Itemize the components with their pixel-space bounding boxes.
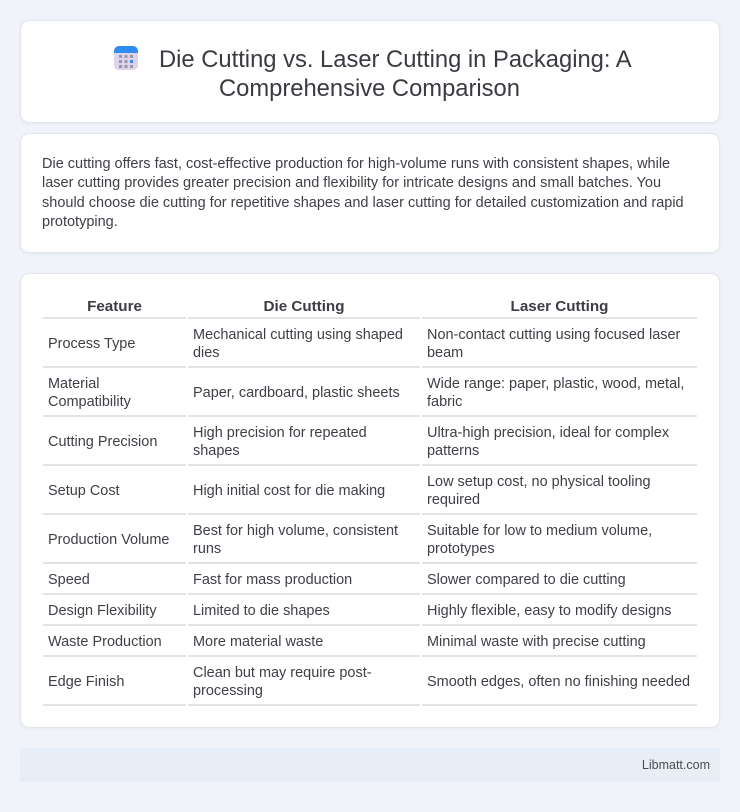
table rows: Fast for mass production	[193, 572, 352, 588]
table rows: prototypes	[427, 541, 495, 557]
icon: calendar	[114, 46, 138, 70]
table rows: required	[427, 492, 480, 508]
table rows: Production Volume	[48, 532, 169, 548]
table rows: Wide range: paper, plastic, wood, metal,	[427, 376, 684, 392]
table rows: Minimal waste with precise cutting	[427, 634, 646, 650]
table rows: Mechanical cutting using shaped	[193, 327, 403, 343]
table rows: Cutting Precision	[48, 434, 157, 450]
panel: comparison table card	[20, 273, 720, 728]
summary text: should choose die cutting for repetitive shapes and laser cutting for detailed customization and rapid	[42, 195, 684, 211]
column header: laser cutting: Laser Cutting	[511, 298, 608, 315]
column header: feature: Feature	[87, 298, 142, 315]
table rows: Clean but may require post-	[193, 665, 372, 681]
table rows: dies	[193, 345, 220, 361]
table rows: Compatibility	[48, 394, 131, 410]
table rows: Limited to die shapes	[193, 603, 330, 619]
table rows: shapes	[193, 443, 240, 459]
table rows: Process Type	[48, 336, 135, 352]
table rows: beam	[427, 345, 463, 361]
table rows: Highly flexible, easy to modify designs	[427, 603, 671, 619]
table rows: Design Flexibility	[48, 603, 157, 619]
table rows: fabric	[427, 394, 462, 410]
table rows: High initial cost for die making	[193, 483, 385, 499]
table rows: Best for high volume, consistent	[193, 523, 398, 539]
table rows: runs	[193, 541, 221, 557]
summary text	[42, 156, 684, 230]
table rows: Waste Production	[48, 634, 162, 650]
panel: title card	[20, 20, 720, 123]
title	[159, 46, 632, 102]
title: Die Cutting vs. Laser Cutting in Packaging: A	[159, 46, 632, 73]
table rows: processing	[193, 683, 263, 699]
table rows: Smooth edges, often no finishing needed	[427, 674, 690, 690]
table rows: More material waste	[193, 634, 323, 650]
table rows: Ultra-high precision, ideal for complex	[427, 425, 669, 441]
summary text: prototyping.	[42, 214, 118, 230]
table rows: Slower compared to die cutting	[427, 572, 626, 588]
table rows: High precision for repeated	[193, 425, 367, 441]
summary text: laser cutting provides greater precision and flexibility for intricate designs and small batches. You	[42, 175, 661, 191]
table rows: Suitable for low to medium volume,	[427, 523, 652, 539]
table rows: Paper, cardboard, plastic sheets	[193, 385, 400, 401]
footer bar	[20, 748, 720, 782]
table rows: patterns	[427, 443, 479, 459]
panel: summary card	[20, 133, 720, 253]
table rows: Edge Finish	[48, 674, 124, 690]
table rows: Setup Cost	[48, 483, 120, 499]
column header: die cutting: Die Cutting	[264, 298, 344, 315]
table rows: Low setup cost, no physical tooling	[427, 474, 651, 490]
table rows: Material	[48, 376, 99, 392]
footer credit: Libmatt.com	[642, 758, 710, 772]
title: Comprehensive Comparison	[219, 75, 520, 102]
comparison table	[43, 298, 697, 706]
table rows: Non-contact cutting using focused laser	[427, 327, 680, 343]
summary text: Die cutting offers fast, cost-effective production for high-volume runs with consistent shapes, while	[42, 156, 670, 172]
table rows: Speed	[48, 572, 90, 588]
